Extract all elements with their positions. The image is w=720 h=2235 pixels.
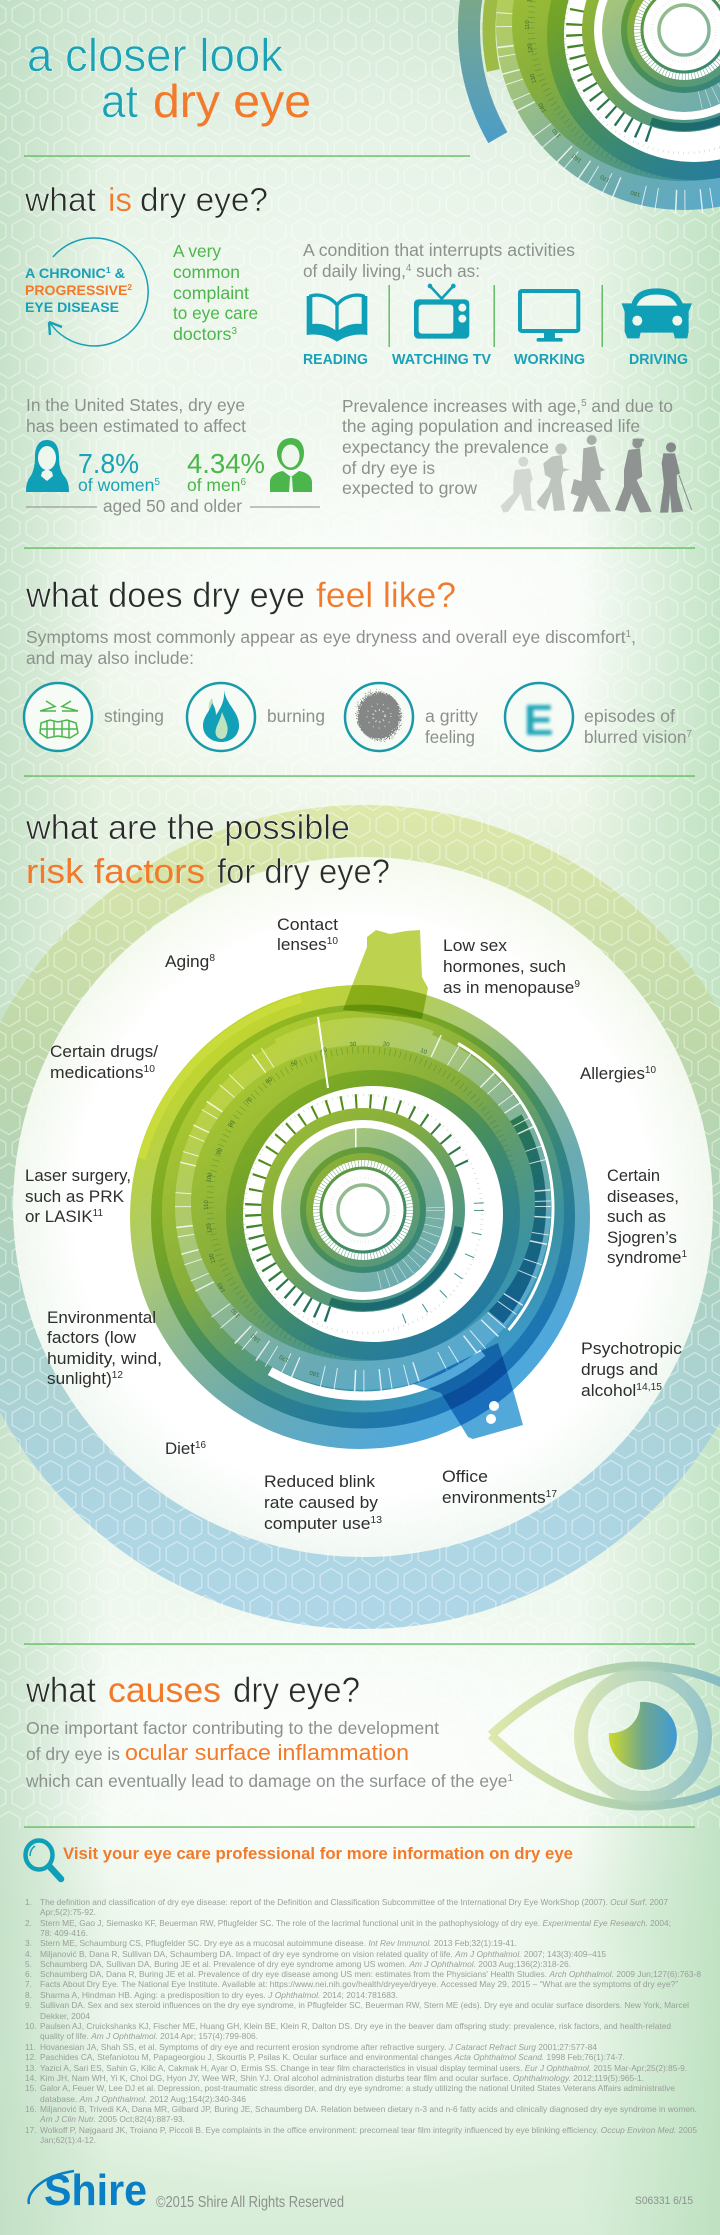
references: 78: 409-416. [40, 1928, 88, 1938]
heading: what does dry eye feel like [25, 576, 456, 615]
label: environmental factors: 12 [112, 1370, 123, 1381]
label: laser surgery: such as PRK [25, 1187, 125, 1206]
text: interrupts daily living: 4 [406, 263, 412, 274]
chart: main iris risk-factor graphic [130, 930, 590, 1449]
symptom: burning: burning [267, 706, 325, 726]
icon: car [622, 288, 692, 338]
icon: grit patch [345, 683, 413, 751]
icon labels: WATCHING TV [392, 352, 491, 368]
title: dry eye [153, 75, 311, 127]
text: common complaint: A very [173, 241, 221, 261]
label: environmental factors: sunlight) [47, 1369, 111, 1388]
label: reduced blink: 13 [370, 1515, 382, 1526]
references: 6. [25, 1969, 32, 1979]
copyright: ©2015 Shire All Rights Reserved [156, 2194, 344, 2211]
symptom: stinging: stinging [104, 706, 164, 726]
label: low sex hormones: Low sex [443, 936, 508, 955]
label: contact lenses [277, 915, 338, 954]
tab: lower notch [413, 1343, 523, 1439]
label: reduced blink: rate caused by [264, 1493, 379, 1512]
label: laser surgery: 11 [93, 1208, 103, 1219]
text: common complaint: doctors [173, 324, 230, 344]
text: common complaint: 3 [231, 326, 237, 337]
text: US prevalence intro: In the United States, dry eye [26, 395, 245, 415]
text: aged 50 and older: aged 50 and older [103, 496, 242, 516]
heading: what causes dry eye: what [25, 1671, 96, 1710]
text: prevalence with age: Prevalence increases with age, [342, 396, 584, 416]
scale numbers: 110 [204, 1199, 210, 1210]
label: environmental factors: factors (low [47, 1328, 137, 1347]
document code: S06331 6/15 [635, 2195, 693, 2207]
risk factor labels [25, 915, 687, 1533]
heading: risk factors: risk factors [26, 853, 205, 891]
callout: chronic and progressive [25, 238, 148, 346]
scale numbers: 20 [382, 1042, 391, 1049]
heading: what is dry eye: what [24, 182, 97, 219]
divider [24, 1643, 695, 1645]
stat: women [26, 440, 160, 495]
outer iris rings [130, 985, 590, 1449]
divider [24, 775, 695, 777]
references: Paulsen AJ, Cruickshanks KJ, Fischer ME, Huang GH, Klein BE, Klein R, Dalton DS. Dry eye in the beaver dam offspring study: prevalence, risk factors, and health-related [40, 2021, 671, 2031]
icon labels [303, 352, 688, 368]
references: 13. [25, 2063, 37, 2073]
stat: men [187, 438, 312, 495]
references: Galor A, Feuer W, Lee DJ et al. Depression, post-traumatic stress disorder, and dry eye syndrome: a study utilizing the national United States Veterans Affairs administrative [40, 2083, 675, 2093]
label: office environments: environments [442, 1488, 544, 1507]
references: 8. [25, 1990, 32, 2000]
symptom: stinging [24, 683, 164, 751]
text: ocular surface inflammation: of dry eye is [26, 1744, 120, 1764]
text: common complaint: to eye care [173, 303, 258, 323]
references: Schaumberg DA, Dana R, Buring JE et al. Prevalence of dry eye disease among US men: estimates from the Physicians' Health Studies. Arch Ophthalmol. 2009 Jun;127(6):763-8 [40, 1969, 701, 1979]
text: ocular surface inflammation [25, 1718, 513, 1791]
references: database. Am J Ophthalmol. 2012 Aug;154(2):340-346 [40, 2094, 246, 2104]
references: Am J Clin Nutr. 2005 Oct;82(4):887-93. [39, 2114, 185, 2124]
label: certain diseases [607, 1166, 687, 1267]
stat: men: 4.34% [187, 448, 265, 479]
stat: women: 5 [154, 477, 160, 488]
text: ocular surface inflammation: ocular surface inflammation [125, 1740, 409, 1765]
label: low sex hormones: as in menopause [443, 978, 572, 997]
scale numbers: 170 [278, 1353, 290, 1363]
heading: risk factors: what are the possible [25, 809, 350, 847]
text: prevalence with age: expectancy the prevalence [342, 437, 549, 457]
text: prevalence with age: and due to [587, 396, 673, 416]
text: symptoms intro: 1 [626, 629, 632, 640]
label: psychotropic drugs: Psychotropic [581, 1339, 683, 1358]
label: office environments [442, 1467, 557, 1507]
references: Stern ME, Gao J, Siemasko KF, Beuerman RW, Pflugfelder SC. The role of the lacrimal functional unit in the pathophysiology of dry eye. Experimental Eye Research. 2004; [40, 1918, 671, 1928]
references: 9. [25, 2000, 32, 2010]
text: prevalence with age: 5 [581, 398, 587, 409]
label: certain diseases: Certain [607, 1166, 660, 1185]
references: Jan;62(1):4-12. [40, 2135, 96, 2145]
text: ocular surface inflammation: 1 [507, 1773, 513, 1784]
scale numbers: 180 [308, 1368, 320, 1377]
label: reduced blink: Reduced blink [264, 1472, 376, 1491]
eye iris graphic: top right [469, 0, 720, 245]
divider [24, 1826, 695, 1828]
label: laser surgery [25, 1166, 131, 1226]
references: Sullivan DA. Sex and sex steroid influences on the dry eye syndrome, in Pflugfelder SC, Beuerman RW, Stern ME (eds). Dry eye and ocular surface disorders. New York, Marcel [40, 2000, 689, 2010]
text: prevalence with age: the aging population and increased life [342, 416, 640, 436]
label: low sex hormones [443, 936, 580, 997]
symptom: blurred vision: 7 [687, 729, 692, 740]
text: ocular surface inflammation: which can eventually lead to damage on the surface of the eye [26, 1771, 510, 1791]
heading: risk factors [25, 809, 390, 891]
label: contact lenses: lenses [277, 935, 326, 954]
icon: blurred E [505, 683, 573, 751]
label: certain diseases: Sjogren’s [607, 1228, 677, 1247]
callout: chronic and progressive: EYE DISEASE [25, 300, 119, 315]
icon: magnifying glass [26, 1840, 61, 1879]
call to action: Visit your eye care professional for more information on dry eye [63, 1845, 573, 1863]
references: 17. [25, 2125, 37, 2135]
heading: what does dry eye feel like: feel like? [316, 576, 456, 615]
icon labels: READING [303, 352, 368, 368]
text: ocular surface inflammation: One important factor contributing to the development [26, 1718, 439, 1738]
text: interrupts daily living: A condition that interrupts activities [303, 240, 575, 260]
scale numbers: 150 [230, 1306, 242, 1318]
references: 5. [25, 1959, 32, 1969]
heading: what causes dry eye: dry eye? [233, 1671, 360, 1710]
logo: Shire: Shire [44, 2166, 147, 2215]
icon: blurred E: E [524, 696, 553, 745]
scale numbers: 70 [245, 1096, 254, 1106]
label: environmental factors [47, 1308, 162, 1388]
title [27, 29, 311, 127]
text: common complaint: common [173, 262, 240, 282]
references [25, 1897, 701, 2145]
icon: stinging face [24, 683, 92, 751]
heading: what is dry eye [24, 182, 268, 219]
text: interrupts daily living: such as: [411, 261, 480, 281]
label: office environments: Office [442, 1467, 488, 1486]
label: psychotropic drugs: alcohol [581, 1381, 635, 1400]
scale numbers: 50 [290, 1060, 299, 1068]
references: Miljanović B, Dana R, Sullivan DA, Schaumberg DA. Impact of dry eye syndrome on vision related quality of life. Am J Ophthalmol. 2007; 143(3):409–415 [40, 1949, 606, 1959]
label: certain drugs: Certain drugs/ [50, 1042, 158, 1061]
label: reduced blink [264, 1472, 382, 1533]
label: diet: Diet [165, 1439, 195, 1458]
callout: chronic and progressive: 1 [106, 266, 111, 275]
label: certain diseases: such as [607, 1207, 666, 1226]
scale numbers: 100 [206, 1172, 214, 1183]
text: symptoms intro: , [631, 627, 636, 647]
text: US prevalence intro: has been estimated to affect [26, 416, 246, 436]
references: Kim JH, Nam WH, Yi K, Choi DG, Hyon JY, Wee WR, Shin YJ. Oral alcohol administration disturbs tear film and ocular surface. Ophthalmology. 2012;119(5):965-1. [40, 2073, 644, 2083]
icon: woman [26, 440, 69, 492]
text: symptoms intro: and may also include: [26, 648, 194, 668]
scale numbers: 130 [208, 1252, 217, 1264]
scale numbers: 120 [206, 1222, 214, 1233]
icon: cycle arrow [49, 238, 148, 346]
callout: chronic and progressive: 2 [127, 283, 133, 292]
references: 16. [25, 2104, 37, 2114]
references: Schaumberg DA, Sullivan DA, Buring JE et al. Prevalence of dry eye syndrome among US women. Am J Ophthalmol. 2003 Aug;136(2):318-26. [40, 1959, 571, 1969]
label: contact lenses: 10 [327, 936, 338, 947]
scale numbers: 80 [228, 1119, 237, 1129]
references: 1. [25, 1897, 32, 1907]
references: 14. [25, 2073, 37, 2083]
background ring of risk-factor panel [0, 805, 720, 1629]
symptom: burning [187, 683, 325, 751]
heading: what is dry eye: is [108, 182, 132, 219]
icon: aging silhouettes [501, 435, 692, 513]
label: certain diseases: 1 [681, 1249, 687, 1260]
heading: what does dry eye feel like: what does dry eye [25, 576, 305, 615]
symptom: blurred vision: episodes of [584, 706, 675, 726]
references: Apr;5(2):75-92. [40, 1907, 96, 1917]
activity icons [303, 284, 692, 368]
label: certain drugs: 10 [144, 1064, 155, 1075]
label: aging: Aging [165, 952, 208, 971]
scale numbers: 160 [250, 1332, 262, 1343]
icon: television [414, 284, 469, 339]
references: 15. [25, 2083, 37, 2093]
references: Paschides CA, Stefaniotou M, Papageorgiou J, Skourtis P, Psilas K. Ocular surface and environmental changes Acta Ophthalmol Scand. 1998 Feb;76(1):74-7. [40, 2052, 625, 2062]
label: psychotropic drugs: drugs and [581, 1360, 658, 1379]
call to action [26, 1840, 573, 1879]
tab: upper lens [343, 930, 428, 1019]
label: aging: 8 [209, 953, 215, 964]
references: Sharma A, Hindman HB. Aging: a predisposition to dry eyes. J Ophthalmol. 2014; 2014:781683. [40, 1990, 398, 2000]
text: interrupts daily living [303, 240, 575, 281]
label: psychotropic drugs [581, 1339, 683, 1400]
text: symptoms intro [26, 627, 636, 668]
label: laser surgery: or LASIK [25, 1207, 93, 1226]
references: 4. [25, 1949, 32, 1959]
scale numbers: 90 [216, 1147, 224, 1156]
heading: what causes dry eye: causes [108, 1671, 221, 1710]
icon: book [307, 295, 367, 342]
label: certain diseases: syndrome [607, 1248, 682, 1267]
symptom: blurred vision [505, 683, 692, 751]
references: Stern ME, Schaumburg CS, Pflugfelder SC. Dry eye as a mucosal autoimmune disease. Int Rev Immunol. 2013 Feb;32(1):19-41. [40, 1938, 517, 1948]
icon labels: DRIVING [629, 352, 688, 368]
scale numbers: 10 [419, 1048, 428, 1056]
title: a closer look [27, 29, 284, 81]
text: symptoms intro: Symptoms most commonly appear as eye dryness and overall eye discomfort [26, 627, 627, 647]
title: at [101, 75, 138, 127]
text: common complaint: complaint [173, 283, 249, 303]
label: low sex hormones: hormones, such [443, 957, 566, 976]
scale numbers: 30 [349, 1042, 357, 1048]
callout: chronic and progressive: A CHRONIC [25, 266, 101, 281]
callout: chronic and progressive: & [111, 266, 125, 281]
symptom: gritty: a gritty [425, 706, 478, 726]
heading: what causes dry eye [25, 1671, 360, 1710]
text: US prevalence intro [26, 395, 246, 436]
label: certain drugs: medications [50, 1063, 141, 1082]
references: Miljanović B, Trivedi KA, Dana MR, Gilbard JP, Buring JE, Schaumberg DA. Relation between dietary n-3 and n-6 fatty acids and clinically diagnosed dry eye syndrome in women. [40, 2104, 697, 2114]
references: Dekker, 2004 [40, 2011, 90, 2021]
text: common complaint [173, 241, 258, 344]
references: 3. [25, 1938, 32, 1948]
references: 10. [25, 2021, 37, 2031]
text: prevalence with age: expected to grow [342, 478, 477, 498]
label: certain drugs [50, 1042, 158, 1082]
stat: women: 7.8% [78, 448, 139, 479]
scale numbers: 60 [265, 1076, 274, 1086]
core rings, ticks and scale [175, 1022, 551, 1390]
label: reduced blink: computer use [264, 1514, 367, 1533]
label: diet: 16 [195, 1440, 206, 1451]
icon labels: WORKING [514, 352, 585, 368]
text: prevalence with age [342, 396, 673, 498]
scale numbers: 140 [217, 1281, 227, 1293]
divider [24, 155, 470, 157]
references: 2. [25, 1918, 32, 1928]
heading: what is dry eye: dry eye? [140, 182, 268, 219]
icon: eye illustration [491, 1666, 720, 1806]
symptom: blurred vision: blurred vision [584, 727, 688, 747]
label: low sex hormones: 9 [574, 979, 580, 990]
inner white disc of risk-factor panel [13, 857, 713, 1557]
symptom: gritty [345, 683, 478, 751]
divider [24, 547, 695, 549]
label: laser surgery: Laser surgery, [25, 1166, 131, 1185]
label: office environments: 17 [546, 1489, 557, 1500]
references: 12. [25, 2052, 37, 2062]
stat: men: 6 [240, 477, 246, 488]
text: prevalence with age: of dry eye is [342, 458, 435, 478]
icon: flame [187, 683, 255, 751]
symptom: gritty: feeling [425, 727, 475, 747]
label: allergies: 10 [645, 1065, 656, 1076]
text: interrupts daily living: of daily living, [303, 261, 408, 281]
references: Facts About Dry Eye. The National Eye Institute. Available at: https://www.nei.nih.gov/health/dryeye/dryeye. Accessed May 29, 2015 – “What are the symptoms of dry eye?” [40, 1979, 678, 1989]
label: allergies: Allergies [580, 1064, 645, 1083]
label: environmental factors: humidity, wind, [47, 1349, 162, 1368]
stat: women: of women [78, 475, 154, 495]
references: Yazici A, Sari ES, Sahin G, Kilic A, Cakmak H, Ayar O, Ermis SS. Change in tear film characteristics in visual display terminal users. Eur J Ophthalmol. 2015 Mar-Apr;25(2):85-9. [40, 2063, 687, 2073]
label: contact lenses: Contact [277, 915, 338, 934]
label: psychotropic drugs: 14,15 [636, 1382, 662, 1393]
references: Hovanesian JA, Shah SS, et al. Symptoms of dry eye and recurrent erosion syndrome after refractive surgery. J Cataract Refract Surg 2001;27:577-84 [40, 2042, 597, 2052]
scale numbers [204, 1042, 428, 1377]
label: environmental factors: Environmental [47, 1308, 156, 1327]
references: The definition and classification of dry eye disease: report of the Definition and Classification Subcommittee of the International Dry Eye WorkShop (2007). Ocul Surf. 2007 [40, 1897, 668, 1907]
label: certain diseases: diseases, [607, 1187, 679, 1206]
icon: monitor [520, 291, 578, 342]
callout: chronic and progressive: PROGRESSIVE [25, 283, 123, 298]
references: 11. [25, 2042, 36, 2052]
references: quality of life. Am J Ophthalmol. 2014 Apr; 157(4):799-806. [40, 2031, 258, 2041]
heading: risk factors: for dry eye? [217, 853, 390, 891]
icon: man [270, 438, 312, 492]
scale numbers: 40 [320, 1047, 328, 1055]
references: 7. [25, 1979, 32, 1989]
stat: men: of men [187, 475, 240, 495]
references: Wolkoff P, Nøjgaard JK, Troiano P, Piccoli B. Eye complaints in the office environment: precorneal tear film integrity influenced by eye blinking efficiency. Occup Environ Med. 2005 [40, 2125, 697, 2135]
